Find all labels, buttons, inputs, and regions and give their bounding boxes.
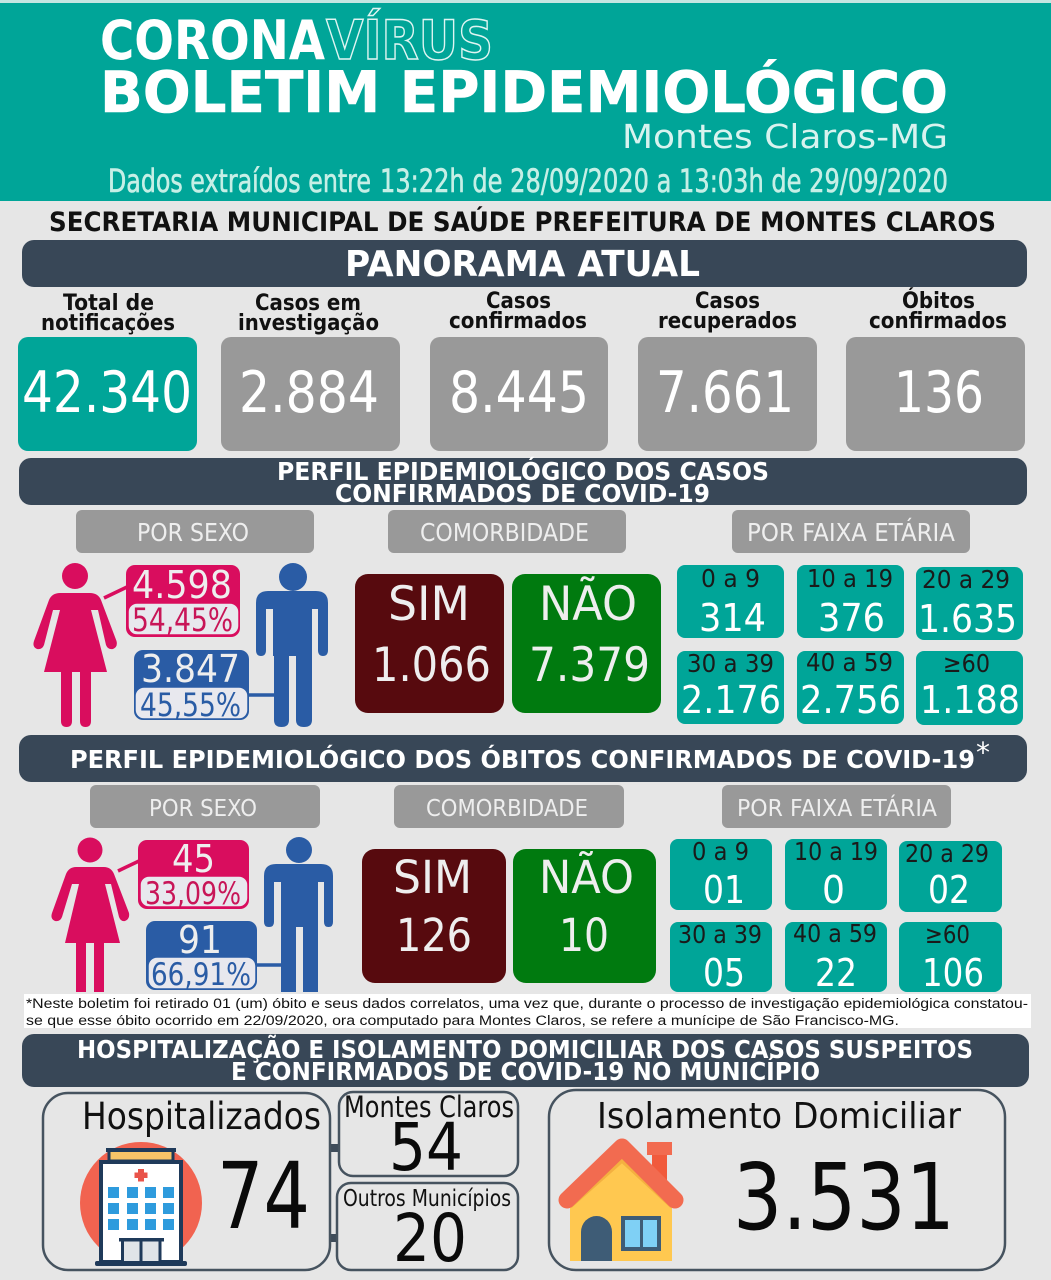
panel: casos em investigação bbox=[221, 291, 400, 451]
age group deaths: 40 a 59: 22 bbox=[815, 951, 857, 995]
age group deaths: 30 a 39: 30 a 39 bbox=[678, 920, 762, 949]
female cases callout bbox=[104, 563, 240, 639]
age group deaths: 10 a 19 bbox=[785, 837, 887, 912]
section bar: hospitalização e isolamento: E CONFIRMADOS DE COVID-19 NO MUNICÍPIO bbox=[231, 1057, 820, 1086]
panel: óbitos confirmados: 136 bbox=[894, 360, 984, 426]
footnote: *Neste boletim foi retirado 01 (um) óbito e seus dados correlatos, uma vez que, durante o processo de investigação epidemiológica constatou- bbox=[26, 996, 1028, 1011]
age group deaths: 20 a 29 bbox=[899, 839, 1002, 912]
age group deaths: 10 a 19: 10 a 19 bbox=[794, 837, 878, 866]
age group deaths: 60 and over bbox=[899, 920, 1002, 995]
age group cases: 20 a 29: 20 a 29 bbox=[922, 565, 1010, 594]
subheading: por sexo, deaths bbox=[90, 785, 320, 828]
section bar: perfil dos casos confirmados: CONFIRMADOS DE COVID-19 bbox=[335, 479, 710, 508]
icon: female figure, deaths bbox=[51, 838, 129, 992]
age group deaths: 20 a 29: 20 a 29 bbox=[905, 839, 989, 868]
panel: hospitalizados bbox=[43, 1093, 340, 1270]
section bar: perfil dos óbitos confirmados: * bbox=[976, 736, 990, 769]
comorbidity: não, deaths bbox=[513, 849, 656, 983]
panel: casos em investigação: 2.884 bbox=[239, 360, 379, 426]
age group cases: 60 and over: 1.188 bbox=[920, 678, 1020, 722]
section bar: perfil dos casos confirmados bbox=[19, 456, 1027, 508]
panel: óbitos confirmados: Óbitos bbox=[902, 288, 975, 314]
subheading: por sexo, deaths: POR SEXO bbox=[149, 796, 257, 822]
age group deaths: 40 a 59: 40 a 59 bbox=[793, 919, 877, 948]
male cases callout: 3.847 bbox=[141, 647, 240, 691]
panel: casos recuperados: recuperados bbox=[658, 309, 797, 334]
panel: total de notificações: notificações bbox=[41, 311, 175, 336]
footnote bbox=[24, 994, 1031, 1028]
age group cases: 40 a 59: 40 a 59 bbox=[806, 648, 893, 677]
data extraction period bbox=[108, 162, 948, 200]
age group cases: 40 a 59 bbox=[797, 648, 904, 724]
panel: isolamento domiciliar: 3.531 bbox=[733, 1144, 955, 1251]
age group cases: 0 a 9: 0 a 9 bbox=[701, 564, 760, 593]
age group deaths: 0 a 9: 01 bbox=[703, 868, 745, 912]
comorbidity: sim, deaths: 126 bbox=[396, 909, 472, 962]
data extraction period: Dados extraídos entre bbox=[108, 162, 371, 200]
age group deaths: 0 a 9: 0 a 9 bbox=[692, 837, 749, 866]
panel: casos em investigação: investigação bbox=[238, 311, 379, 336]
subheading: comorbidade: COMORBIDADE bbox=[420, 518, 589, 547]
age group cases: 40 a 59: 2.756 bbox=[800, 678, 901, 722]
subheading: por faixa etária, deaths bbox=[722, 785, 951, 828]
panel: outros municípios hospitalized: 20 bbox=[393, 1200, 467, 1277]
section bar: perfil dos óbitos confirmados: PERFIL EPIDEMIOLÓGICO DOS ÓBITOS CONFIRMADOS DE COVID-19 bbox=[70, 744, 975, 774]
age group cases: 0 a 9: 314 bbox=[699, 596, 766, 640]
panel: total de notificações: Total de bbox=[63, 291, 154, 316]
age group cases: 0 a 9 bbox=[677, 564, 784, 640]
panel: total de notificações bbox=[18, 291, 197, 451]
age group deaths: 20 a 29: 02 bbox=[928, 868, 970, 912]
age group cases: 30 a 39: 2.176 bbox=[681, 678, 781, 722]
panel: casos recuperados: 7.661 bbox=[656, 360, 794, 426]
female cases callout: 54,45% bbox=[132, 601, 233, 639]
panel: óbitos confirmados: confirmados bbox=[869, 309, 1007, 334]
panel: montes claros hospitalized bbox=[339, 1090, 518, 1186]
age group deaths: 10 a 19: 0 bbox=[822, 868, 845, 912]
male deaths callout: 91 bbox=[178, 918, 222, 962]
subheading: por faixa etária: POR FAIXA ETÁRIA bbox=[747, 518, 955, 547]
panel: outros municípios hospitalized: Outros Municípios bbox=[343, 1186, 511, 1212]
male deaths callout: 66,91% bbox=[151, 957, 251, 993]
panel: montes claros hospitalized: 54 bbox=[389, 1109, 463, 1186]
male deaths callout bbox=[146, 918, 282, 993]
panel: casos confirmados: confirmados bbox=[449, 309, 587, 334]
title: coronavírus: VÍRUS bbox=[326, 9, 493, 72]
title: coronavírus bbox=[100, 9, 493, 72]
female cases callout: 4.598 bbox=[132, 563, 232, 607]
icon: male figure, cases bbox=[256, 563, 328, 727]
panel: óbitos confirmados bbox=[846, 288, 1025, 451]
section bar: perfil dos casos confirmados: PERFIL EPIDEMIOLÓGICO DOS CASOS bbox=[277, 456, 769, 486]
panel: montes claros hospitalized: Montes Claros bbox=[344, 1090, 514, 1124]
comorbidity: não, cases bbox=[512, 574, 661, 713]
age group cases: 60 and over bbox=[916, 649, 1023, 725]
female deaths callout bbox=[118, 837, 249, 912]
age group deaths: 40 a 59 bbox=[785, 919, 887, 995]
male cases callout: 45,55% bbox=[140, 686, 241, 724]
footnote: se que esse óbito ocorrido em 22/09/2020, ora computado para Montes Claros, se refere a munícipe de São Francisco-MG. bbox=[26, 1013, 899, 1028]
panel: casos recuperados bbox=[638, 289, 817, 451]
comorbidity: não, cases: NÃO bbox=[539, 577, 637, 632]
icon: hospital bbox=[80, 1142, 202, 1266]
panel: isolamento domiciliar: Isolamento Domiciliar bbox=[597, 1096, 961, 1137]
male cases callout bbox=[134, 647, 276, 724]
panel: total de notificações: 42.340 bbox=[22, 360, 192, 426]
age group cases: 60 and over: ≥60 bbox=[943, 649, 990, 678]
panel: casos confirmados: Casos bbox=[486, 289, 551, 314]
subtitle: city: Montes Claros-MG bbox=[622, 117, 948, 156]
age group cases: 10 a 19 bbox=[797, 564, 904, 640]
female deaths callout: 33,09% bbox=[145, 876, 241, 912]
panel: casos em investigação: Casos em bbox=[255, 291, 361, 316]
panel: outros municípios hospitalized bbox=[337, 1183, 518, 1277]
title: coronavírus: CORONA bbox=[100, 9, 325, 72]
icon: male figure, deaths bbox=[264, 837, 333, 992]
comorbidity: não, deaths: 10 bbox=[559, 909, 609, 962]
subheading: por faixa etária, deaths: POR FAIXA ETÁRIA bbox=[737, 794, 937, 822]
panel: isolamento domiciliar bbox=[549, 1090, 1005, 1270]
subheading: comorbidade, deaths bbox=[394, 785, 624, 828]
age group deaths: 60 and over: ≥60 bbox=[925, 920, 970, 949]
subheading: por sexo: POR SEXO bbox=[137, 518, 249, 547]
age group cases: 30 a 39: 30 a 39 bbox=[687, 649, 774, 678]
section bar: hospitalização e isolamento: HOSPITALIZAÇÃO E ISOLAMENTO DOMICILIAR DOS CASOS SUSPEITOS bbox=[77, 1035, 973, 1064]
comorbidity: sim, deaths bbox=[362, 849, 506, 983]
section bar: perfil dos óbitos confirmados bbox=[19, 735, 1027, 782]
age group cases: 30 a 39 bbox=[677, 649, 784, 724]
panel: casos confirmados bbox=[430, 289, 608, 451]
age group deaths: 30 a 39: 05 bbox=[703, 951, 745, 995]
subheading: por sexo bbox=[76, 510, 314, 553]
icon: female figure, cases bbox=[33, 563, 117, 727]
section bar: hospitalização e isolamento bbox=[22, 1034, 1029, 1087]
comorbidity: não, cases: 7.379 bbox=[529, 638, 650, 693]
section bar: panorama atual: PANORAMA ATUAL bbox=[345, 244, 700, 285]
subheading: comorbidade, deaths: COMORBIDADE bbox=[426, 796, 588, 822]
female deaths callout: 45 bbox=[172, 837, 215, 881]
comorbidity: sim, cases: 1.066 bbox=[372, 638, 491, 693]
panel: casos confirmados: 8.445 bbox=[449, 360, 589, 426]
subheading: comorbidade bbox=[388, 510, 626, 553]
panel: hospitalizados: Hospitalizados bbox=[82, 1095, 321, 1138]
comorbidity: sim, cases: SIM bbox=[388, 577, 470, 632]
age group deaths: 30 a 39 bbox=[670, 920, 772, 995]
section bar: panorama atual bbox=[22, 240, 1027, 287]
panel: hospitalizados: 74 bbox=[217, 1143, 310, 1250]
age group cases: 20 a 29 bbox=[916, 565, 1023, 641]
panel: casos recuperados: Casos bbox=[695, 289, 760, 314]
subheading: por faixa etária bbox=[732, 510, 970, 553]
comorbidity: sim, deaths: SIM bbox=[393, 851, 472, 904]
header banner bbox=[0, 0, 1051, 201]
age group cases: 10 a 19: 376 bbox=[818, 596, 885, 640]
age group deaths: 0 a 9 bbox=[670, 837, 772, 912]
title: boletim epidemiológico: BOLETIM EPIDEMIOLÓGICO bbox=[100, 58, 948, 126]
age group cases: 10 a 19: 10 a 19 bbox=[807, 564, 893, 593]
icon: house bbox=[567, 1142, 675, 1261]
age group deaths: 60 and over: 106 bbox=[922, 951, 984, 995]
age group cases: 20 a 29: 1.635 bbox=[918, 597, 1017, 641]
comorbidity: sim, cases bbox=[355, 574, 504, 713]
comorbidity: não, deaths: NÃO bbox=[539, 851, 634, 904]
